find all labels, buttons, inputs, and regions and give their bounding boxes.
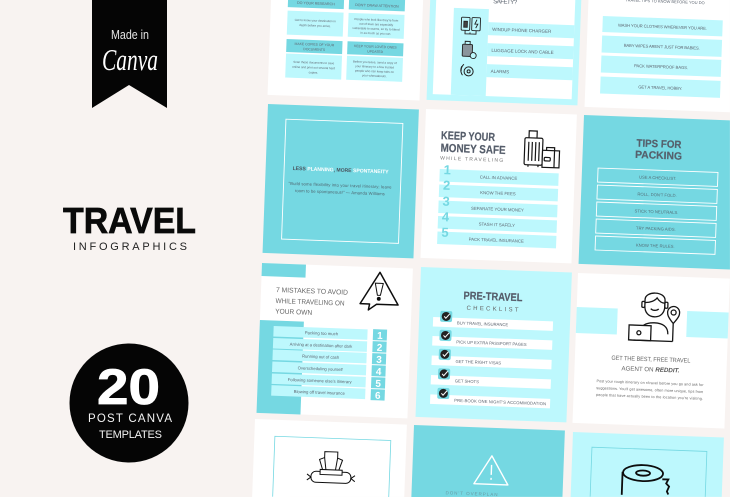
text box: loved ones: Before you leave, send a copy of bbox=[353, 60, 397, 65]
text box: loved ones: your whereabouts. bbox=[362, 73, 387, 78]
heading: TIPS FOR bbox=[636, 137, 682, 151]
row 3: running out of cash: Running out of cash bbox=[302, 354, 340, 360]
bar: pack waterproof bags bbox=[601, 55, 721, 77]
item 4: get shots bbox=[431, 368, 551, 389]
item 1: buy travel insurance bbox=[433, 310, 553, 331]
bar 2: know the fees: KNOW THE FEES bbox=[480, 190, 516, 196]
item 3: get the right visas bbox=[431, 348, 552, 369]
text box: documents: Scan these documents to save bbox=[293, 60, 335, 65]
icon: alarm bbox=[461, 64, 473, 76]
paragraph bbox=[596, 379, 704, 401]
bar: wash your clothes bbox=[602, 16, 723, 36]
heading: WHILE TRAVELING ON bbox=[275, 298, 345, 308]
item 5: pre-book accommodation: PRE-BOOK ONE NIGHT'S ACCOMMODATION bbox=[454, 398, 546, 406]
ribbon badge: Made in Canva: Canva bbox=[102, 42, 158, 77]
heading: AGENT ON REDDIT. bbox=[621, 365, 680, 374]
panel: toilet paper bbox=[571, 432, 724, 497]
box: stick to neutrals: STICK TO NEUTRALS. bbox=[635, 208, 678, 215]
row 5: following someone else's itinerary bbox=[272, 373, 385, 390]
text box: research: depth before you arrive. bbox=[299, 23, 331, 28]
panel: keep your money safe bbox=[421, 109, 577, 263]
heading bbox=[275, 287, 348, 318]
row 1: packing too much: Packing too much bbox=[305, 330, 339, 336]
icon: wipes pack bbox=[307, 451, 356, 484]
box: roll don't fold bbox=[597, 185, 717, 203]
box: try packing aids: TRY PACKING AIDS. bbox=[636, 225, 676, 232]
text box: attention: vulnerable to scams, so try to blend bbox=[352, 26, 400, 32]
panel: less planning more spontaneity quote bbox=[263, 104, 419, 258]
row 2: arriving after dark bbox=[273, 337, 387, 354]
bar 4: stash it safely bbox=[438, 209, 557, 233]
icon: warning speech triangle bbox=[360, 272, 399, 311]
row 6: blowing off travel insurance: Blowing off travel insurance bbox=[294, 389, 346, 396]
ribbon badge: Made in Canva bbox=[92, 0, 167, 108]
text box: loved ones: your itinerary to a few trusted bbox=[355, 64, 394, 70]
icon: person with laptop and map pin bbox=[629, 292, 680, 342]
text box: research bbox=[287, 11, 344, 37]
bar 3: separate your money: 3 bbox=[442, 194, 450, 209]
bar 5: pack travel insurance: 5 bbox=[441, 225, 449, 240]
bar 1: call in advance: CALL IN ADVANCE bbox=[480, 175, 517, 181]
bar 1: call in advance bbox=[439, 162, 559, 186]
row 6: blowing off travel insurance bbox=[271, 385, 385, 402]
quote: room to be spontaneous!" — Amanda Williams bbox=[295, 188, 385, 196]
box: roll don't fold: ROLL, DON'T FOLD. bbox=[637, 192, 677, 198]
panel: free travel agent on Reddit bbox=[573, 273, 730, 428]
bar 2: know the fees bbox=[439, 178, 558, 201]
bar: pack waterproof bags: PACK WATERPROOF BAGS. bbox=[634, 63, 688, 70]
bar: baby wipes bbox=[602, 35, 722, 57]
row 4: overscheduling yourself: 4 bbox=[376, 367, 382, 378]
badge: 20 post Canva templates bbox=[70, 344, 188, 462]
box: try packing aids bbox=[596, 219, 716, 237]
header: make copies of your documents bbox=[286, 39, 343, 54]
panel: research and documents tips bbox=[268, 0, 425, 100]
heading bbox=[611, 355, 691, 375]
title: Travel Infographics: TRAVEL bbox=[63, 200, 196, 241]
ribbon badge: Made in Canva: Made in bbox=[111, 28, 149, 42]
header: do your research bbox=[288, 0, 344, 9]
bar 4: stash it safely: 4 bbox=[442, 209, 450, 224]
heading: LESS PLANNING, MORE SPONTANEITY bbox=[293, 166, 389, 175]
bar: alarms: ALARMS bbox=[491, 69, 509, 74]
item 5: pre-book accommodation bbox=[430, 387, 551, 408]
header: make copies of your documents: DOCUMENTS bbox=[303, 47, 326, 52]
paragraph: people that have actually been to the location you're visiting. bbox=[596, 393, 703, 401]
item 2: pick up extra passport pages: PICK UP EXTRA PASSPORT PAGES bbox=[456, 339, 527, 347]
title: Travel Infographics: INFOGRAPHICS bbox=[73, 241, 187, 253]
text box: attention: out of town are especially bbox=[359, 22, 394, 27]
text box: attention: People who look like they're from bbox=[354, 17, 399, 23]
bar 5: pack travel insurance bbox=[437, 225, 557, 248]
text box: documents bbox=[285, 54, 342, 80]
box: know the rules bbox=[595, 236, 715, 254]
bar 4: stash it safely: STASH IT SAFELY bbox=[479, 222, 515, 228]
row 6: blowing off travel insurance: 6 bbox=[375, 391, 381, 402]
bar: windup phone charger bbox=[488, 22, 574, 38]
caption: DON'T OVERPLAN bbox=[445, 490, 498, 497]
heading: KEEP YOUR bbox=[441, 130, 496, 144]
row 2: arriving after dark: 2 bbox=[376, 343, 383, 354]
heading bbox=[635, 137, 683, 163]
text box: documents: copies. bbox=[309, 70, 318, 75]
icon: luggage lock bbox=[462, 41, 477, 59]
bar 3: separate your money: SEPARATE YOUR MONEY bbox=[471, 206, 524, 213]
quote: "Build some flexibility into your travel itinerary; leave bbox=[289, 181, 392, 190]
row 4: overscheduling yourself: Overscheduling yourself bbox=[298, 365, 344, 372]
item 1: buy travel insurance: BUY TRAVEL INSURANCE bbox=[457, 320, 509, 327]
icon: phone chargers bbox=[461, 17, 481, 34]
heading: WHILE TRAVELING bbox=[440, 156, 503, 164]
text box: loved ones: people who can keep tabs on bbox=[355, 69, 394, 74]
item 2: pick up extra passport pages bbox=[432, 329, 553, 350]
badge: 20 post Canva templates: POST CANVA bbox=[88, 413, 172, 425]
text box: documents: online and print out several hard bbox=[292, 65, 335, 70]
icon: warning triangle bbox=[474, 455, 509, 485]
heading: CHECKLIST bbox=[466, 306, 519, 314]
heading: PACKING bbox=[635, 149, 682, 163]
row 4: overscheduling yourself bbox=[272, 361, 386, 378]
header: keep your loved ones updated bbox=[347, 41, 404, 56]
heading: 7 MISTAKES TO AVOID bbox=[276, 287, 348, 297]
heading: PRE-TRAVEL bbox=[463, 290, 523, 304]
item 4: get shots: GET SHOTS bbox=[455, 378, 479, 384]
header: don't draw attention bbox=[349, 0, 405, 11]
bar: wash your clothes: WASH YOUR CLOTHES WHEREVER YOU ARE. bbox=[618, 23, 707, 31]
bar: baby wipes: BABY WIPES AREN'T JUST FOR BABIES. bbox=[624, 43, 700, 51]
item 3: get the right visas: GET THE RIGHT VISAS bbox=[455, 359, 501, 366]
panel: travel safety gadgets bbox=[427, 0, 583, 105]
bar: luggage lock and cable: LUGGAGE LOCK AND CABLE bbox=[491, 48, 554, 55]
panel: 7 mistakes to avoid bbox=[257, 263, 413, 418]
row 3: running out of cash bbox=[272, 349, 386, 366]
paragraph: Post your rough itinerary on r/travel before you go and ask for bbox=[596, 379, 704, 387]
panel: travel tips list bbox=[585, 0, 730, 112]
panel: don't overplan warning bbox=[411, 425, 565, 497]
row 1: packing too much bbox=[273, 325, 387, 342]
heading: YOUR OWN bbox=[275, 309, 312, 317]
bar 5: pack travel insurance: PACK TRAVEL INSURANCE bbox=[469, 237, 524, 244]
icon: toilet paper roll bbox=[622, 464, 670, 497]
header: make copies of your documents: MAKE COPIES OF YOUR bbox=[295, 42, 335, 47]
row 5: following someone else's itinerary: 5 bbox=[375, 379, 382, 390]
header: do your research: DO YOUR RESEARCH bbox=[297, 1, 335, 6]
text box: attention bbox=[348, 13, 405, 39]
icon: suitcases bbox=[524, 131, 560, 168]
row 1: packing too much: 1 bbox=[377, 331, 383, 342]
panel: pre-travel checklist bbox=[416, 267, 572, 422]
quote bbox=[288, 181, 392, 197]
panel: tips for packing bbox=[579, 115, 730, 269]
paragraph: suggestions. You'll get awesome, often more unique, tips from bbox=[596, 386, 703, 394]
bar: windup phone charger: WINDUP PHONE CHARGER bbox=[492, 27, 552, 34]
bar: get a travel hobby: GET A TRAVEL HOBBY. bbox=[638, 84, 682, 91]
box: stick to neutrals bbox=[596, 202, 717, 220]
row 5: following someone else's itinerary: Following someone else's itinerary bbox=[288, 377, 353, 384]
heading bbox=[463, 290, 523, 314]
bar: luggage lock and cable bbox=[487, 43, 574, 59]
bar 2: know the fees: 2 bbox=[443, 178, 451, 193]
header: keep your loved ones updated: UPDATED bbox=[367, 50, 384, 54]
text box: loved ones bbox=[346, 56, 403, 82]
bar: alarms bbox=[486, 64, 573, 80]
row 2: arriving after dark: Arriving at a destination after dark bbox=[290, 342, 353, 349]
text box: attention: in as much as you can. bbox=[360, 31, 391, 36]
bar 3: separate your money bbox=[438, 194, 558, 217]
bar: get a travel hobby bbox=[600, 76, 721, 98]
text box: research: Get to know your destination in bbox=[295, 18, 336, 23]
header: don't draw attention: DON'T DRAW ATTENTION bbox=[355, 3, 399, 9]
row 3: running out of cash: 3 bbox=[376, 355, 382, 366]
heading: GET THE BEST, FREE TRAVEL bbox=[611, 355, 691, 365]
bar 1: call in advance: 1 bbox=[443, 162, 451, 177]
box: know the rules: KNOW THE RULES. bbox=[636, 242, 675, 249]
panel: baby wipes bbox=[252, 419, 407, 497]
box: use a checklist bbox=[598, 168, 718, 186]
header: keep your loved ones updated: KEEP YOUR LOVED ONES bbox=[354, 44, 397, 50]
box: use a checklist: USE A CHECKLIST. bbox=[639, 175, 677, 181]
heading: MONEY SAFE bbox=[440, 143, 506, 157]
heading bbox=[440, 130, 506, 164]
badge: 20 post Canva templates: TEMPLATES bbox=[99, 429, 162, 441]
badge: 20 post Canva templates: 20 bbox=[97, 359, 160, 415]
